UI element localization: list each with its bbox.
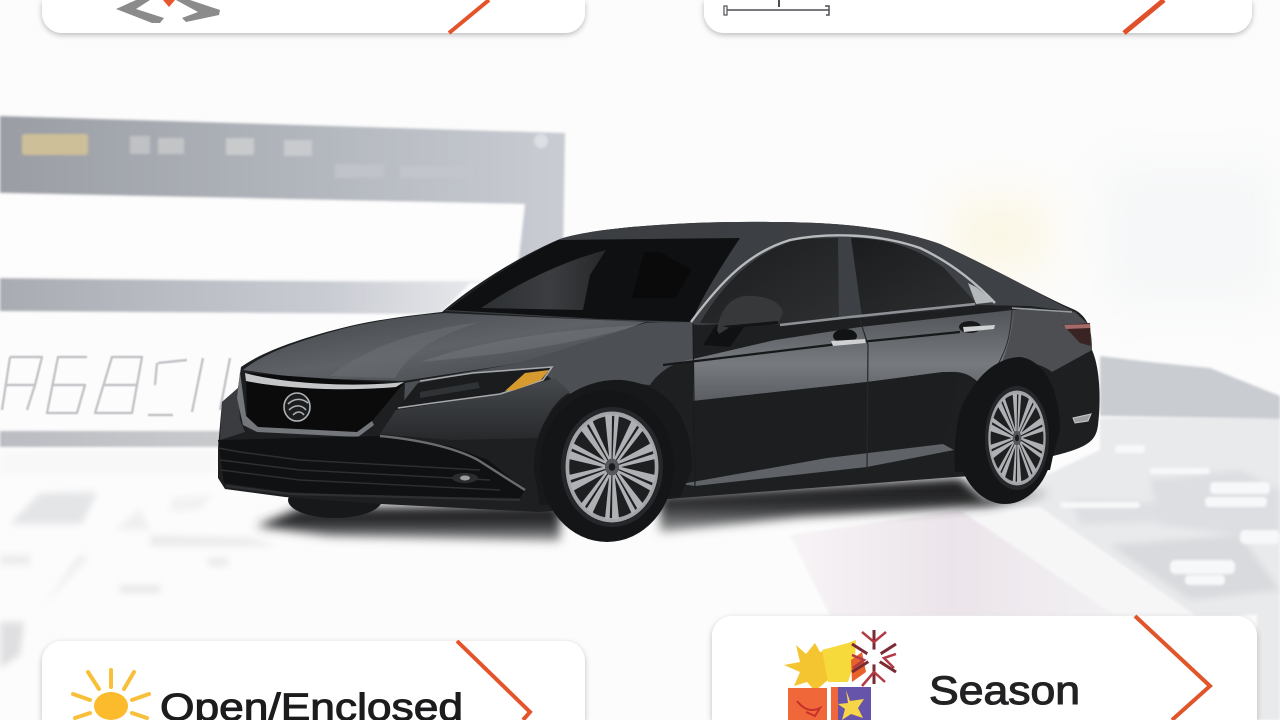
- hood: [243, 313, 645, 381]
- icon: ruler dimension: [724, 0, 829, 15]
- heading: Season: Season: [929, 669, 1080, 713]
- blurred keyboard on the right: [790, 418, 1280, 720]
- arrow: chevron: [1135, 616, 1210, 720]
- side lower panels: [693, 372, 957, 484]
- winter snowflake: [852, 630, 896, 686]
- door handles: [831, 321, 995, 346]
- fender and front door upper: [404, 322, 693, 404]
- autumn leaf: [851, 652, 866, 682]
- calculator display housing: [0, 116, 565, 447]
- far front wheel: [288, 482, 382, 518]
- side mirror: [703, 296, 783, 347]
- emblem: [284, 393, 310, 421]
- card: Season: [712, 616, 1257, 720]
- body crease and seams: [663, 310, 1012, 490]
- calculator digits: [2, 357, 230, 415]
- rear badge: [1073, 414, 1091, 423]
- tail light: [1063, 323, 1091, 346]
- arrow: chevron: [1124, 0, 1164, 33]
- car: [218, 222, 1100, 542]
- headlamp: [398, 367, 552, 408]
- summer sun: [784, 640, 856, 691]
- calculator keys: [0, 452, 278, 668]
- lower bumper: [218, 436, 525, 500]
- purple tile with star: [831, 687, 871, 720]
- blurred right-hand object: [1100, 356, 1280, 419]
- body silhouette: [218, 222, 1100, 512]
- rocker highlight: [681, 444, 954, 486]
- card: top-left: [42, 0, 585, 33]
- ground shadow: [256, 478, 1050, 541]
- icon: sun: [73, 670, 149, 720]
- grille: [237, 372, 404, 437]
- front bumper corner: [220, 388, 245, 440]
- side windows: [700, 238, 994, 325]
- rear wheel: [955, 357, 1060, 504]
- roof and pillars: [445, 222, 1075, 325]
- arrow: chevron: [449, 0, 489, 33]
- front wheel: [534, 380, 692, 542]
- orange tile: [788, 688, 827, 720]
- chrome window trim: [691, 235, 995, 322]
- icon: four seasons: [784, 630, 896, 720]
- arrow: chevron: [457, 641, 530, 720]
- front door and rear door upper panel: [663, 308, 1060, 401]
- card: Open/Enclosed: [42, 641, 585, 720]
- icon: isometric gray bracket with red marker: [116, 0, 220, 23]
- windshield: [447, 238, 740, 322]
- card: top-right: [704, 0, 1252, 33]
